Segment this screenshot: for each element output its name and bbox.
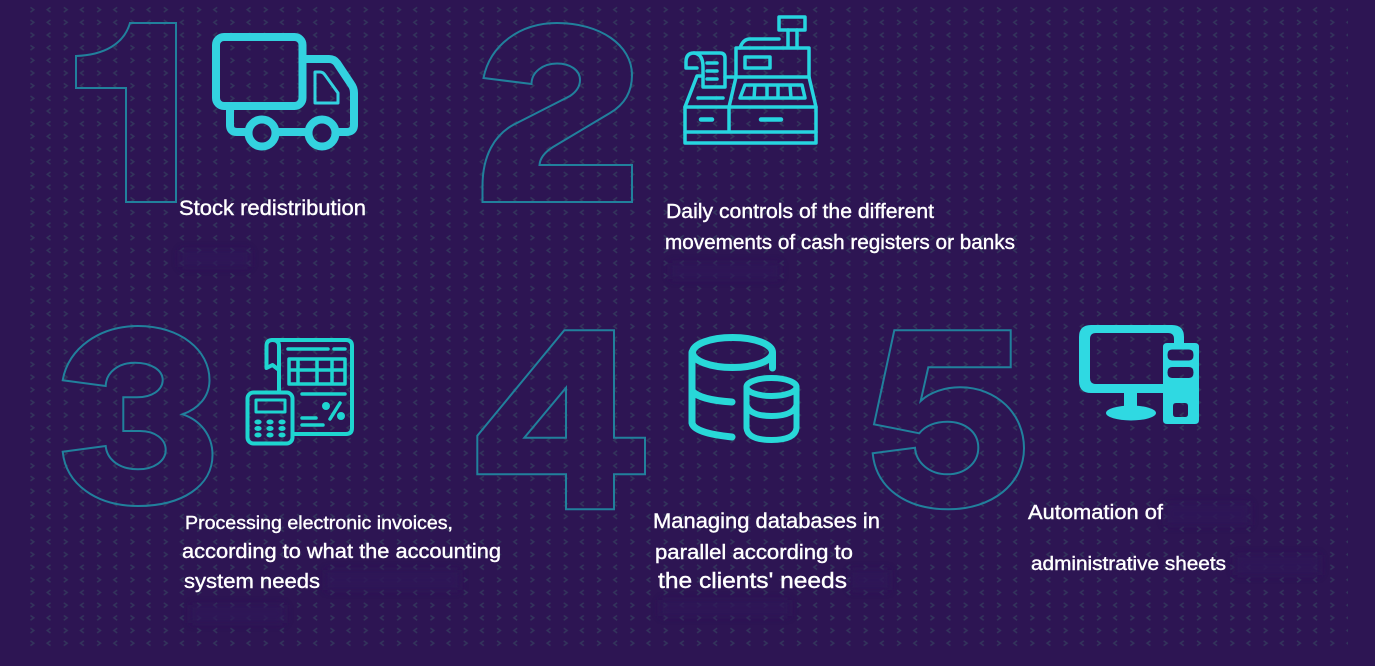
icon: cash register xyxy=(685,17,816,143)
label: system needs xyxy=(184,571,320,593)
label: Processing electronic invoices, xyxy=(185,512,453,533)
label: administrative sheets xyxy=(1031,554,1226,575)
icon: invoice and calculator xyxy=(248,340,352,444)
label: Automation of xyxy=(1028,501,1163,524)
label: Daily controls of the different xyxy=(666,201,934,223)
label: movements of cash registers or banks xyxy=(665,232,1015,254)
number 4 outline xyxy=(477,330,645,509)
label: Stock redistribution xyxy=(179,197,366,220)
label: Managing databases in xyxy=(653,510,880,533)
label: according to what the accounting xyxy=(182,541,501,563)
panel: step 1 stock redistribution xyxy=(76,23,366,220)
label xyxy=(182,512,501,593)
label xyxy=(665,201,1015,254)
number 1 outline xyxy=(76,23,176,202)
number 3 outline xyxy=(63,326,213,506)
panel: step 2 cash controls xyxy=(482,17,1015,254)
panel: step 5 administrative sheets xyxy=(873,325,1226,575)
icon: delivery truck xyxy=(216,37,354,146)
label: the clients' needs xyxy=(658,568,847,593)
number 5 outline xyxy=(873,330,1024,509)
label xyxy=(653,510,880,593)
icon: database cylinders xyxy=(692,338,796,440)
label: parallel according to xyxy=(655,541,853,564)
icon: desktop computer xyxy=(1079,325,1199,424)
label xyxy=(1028,501,1226,575)
panel: step 4 databases xyxy=(477,330,880,593)
number 2 outline xyxy=(482,23,632,202)
panel: step 3 electronic invoices xyxy=(63,326,501,593)
